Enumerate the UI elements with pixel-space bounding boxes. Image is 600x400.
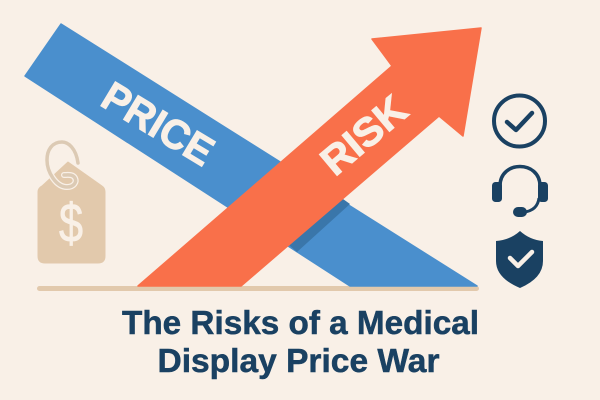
icon: check circle — [494, 96, 545, 146]
baseline — [37, 286, 479, 291]
blue price band — [25, 24, 477, 286]
icon: price tag — [38, 142, 105, 263]
label: PRICE: PRICE — [94, 73, 222, 175]
icon: headset — [492, 166, 548, 217]
dollar sign: $ — [59, 192, 83, 254]
icon: shield with check — [496, 231, 543, 288]
title: The Risks of a Medical — [122, 304, 479, 341]
title — [122, 304, 479, 379]
band shadow — [289, 199, 350, 252]
label: RISK: RISK — [312, 87, 416, 184]
title: Display Price War — [158, 342, 440, 379]
